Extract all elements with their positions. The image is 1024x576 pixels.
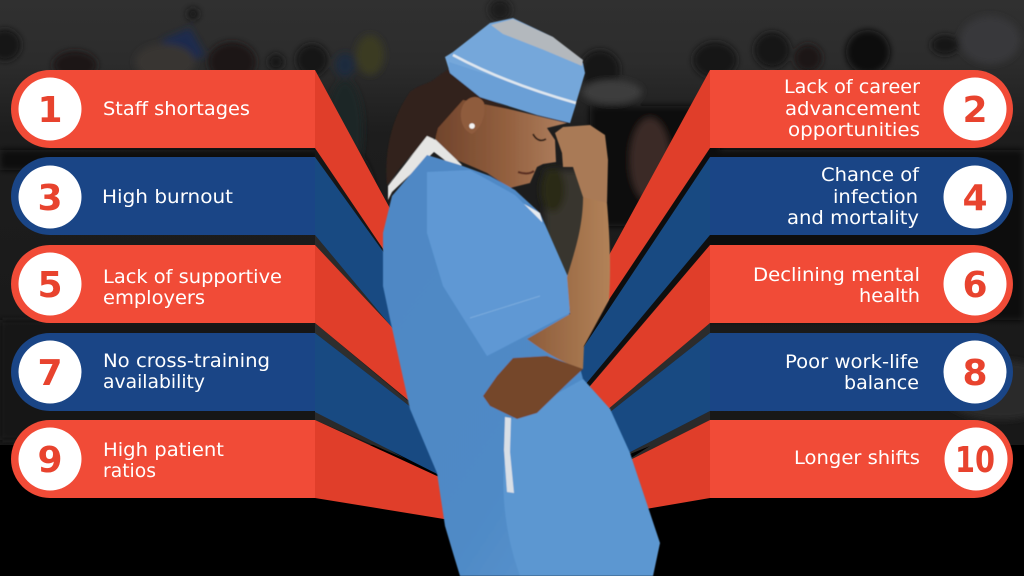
number badge 4 [944,166,1006,228]
number badge 2: 2 [962,90,988,131]
number badge 5 [18,252,82,316]
number badge 1 [18,78,82,140]
ribbon fold 3 [315,157,400,337]
label 9: High patient [103,440,224,461]
neck tie collar [388,136,462,200]
nurse figure [383,18,660,576]
number badge 6 [944,252,1006,316]
panel: factor 1 [11,70,400,274]
number badge 6: 6 [962,265,988,306]
label 5: Lack of supportive [103,267,282,288]
scrub cap [445,18,585,123]
ribbon bar 10 [710,420,1013,498]
number badge 1: 1 [37,90,63,131]
panel: factor 4 [575,157,1013,385]
label 6: Declining mental [753,265,920,286]
panel: factor 9 [11,420,450,520]
label 7 [103,351,270,393]
label 2 [784,77,920,141]
label 4 [787,165,919,229]
ribbon fold 4 [575,157,710,385]
label 10: Longer shifts [794,448,920,469]
panel: factor 5 [11,245,425,414]
label 2: opportunities [788,120,920,141]
panel: factor 8 [600,333,1013,460]
label 7: availability [103,372,205,393]
label 2: advancement [785,99,920,120]
label 6: health [859,286,920,307]
label 8: Poor work-life [785,352,919,373]
label 1: Staff shortages [103,99,250,120]
number badge 9: 9 [37,440,63,481]
ribbon bar 1 [11,70,315,148]
neck and face [433,100,567,188]
label 3: High burnout [102,187,233,208]
label 2: Lack of career [784,77,920,98]
ponytail hair [386,68,512,185]
label 7: No cross-training [103,351,270,372]
cap stripe [453,55,576,103]
number badge 10: 10 [955,440,995,481]
label 4: and mortality [787,208,919,229]
label 8 [785,352,919,394]
ribbon fold 5 [315,245,425,414]
label 4: infection [833,187,918,208]
ribbon fold 7 [315,333,445,478]
ribbon bar 9 [11,420,315,498]
number badge 9 [18,428,82,490]
label 4: Chance of [821,165,919,186]
number badge 8: 8 [962,353,988,394]
number badge 10 [944,428,1008,490]
ribbon bar 5 [11,245,315,323]
label 5: employers [103,288,205,309]
ribbon bar 7 [11,333,315,411]
sleeve seam [470,296,540,318]
ribbon fold 1 [315,70,400,274]
scrub tie [504,417,514,493]
earring [469,123,475,129]
ribbon fold 8 [600,333,710,460]
ribbon bar 8 [710,333,1013,411]
label 6 [753,265,920,307]
cap lower band [449,62,576,123]
raised hand [555,125,608,203]
ear [461,97,484,134]
closed eye [533,134,546,140]
panel: factor 2 [590,70,1013,328]
number badge 7: 7 [37,353,63,394]
panel: factor 10 [620,420,1013,510]
label 9: ratios [103,461,156,482]
label 8: balance [844,373,919,394]
label 9 [103,440,224,482]
skirt highlight [503,379,658,576]
panel: factor 3 [11,157,400,337]
ribbon bar 6 [710,245,1013,323]
ribbon fold 9 [315,420,450,520]
number badge 7 [18,340,82,404]
mouth [518,171,534,173]
ribbon fold 2 [590,70,710,328]
number badge 4: 4 [962,178,988,219]
cap white top [491,19,583,66]
ribbon bar 2 [710,70,1013,148]
sleeve [427,170,570,356]
number badge 3 [18,166,82,228]
panel: factor 7 [11,333,445,478]
panel: factor 6 [585,245,1013,416]
number badge 5: 5 [37,265,63,306]
number badge 2 [944,78,1006,140]
label 5 [103,267,282,309]
scrub body [383,155,660,576]
ribbon bar 4 [710,157,1013,235]
ribbon fold 6 [585,245,710,416]
ribbon bar 3 [11,157,315,235]
forearm [527,190,610,369]
number badge 3: 3 [37,178,63,219]
inner collar [517,200,548,244]
fan shadows [315,148,710,484]
ribbon fold 10 [620,420,710,510]
number badge 8 [944,340,1006,404]
lower hand [483,356,583,419]
